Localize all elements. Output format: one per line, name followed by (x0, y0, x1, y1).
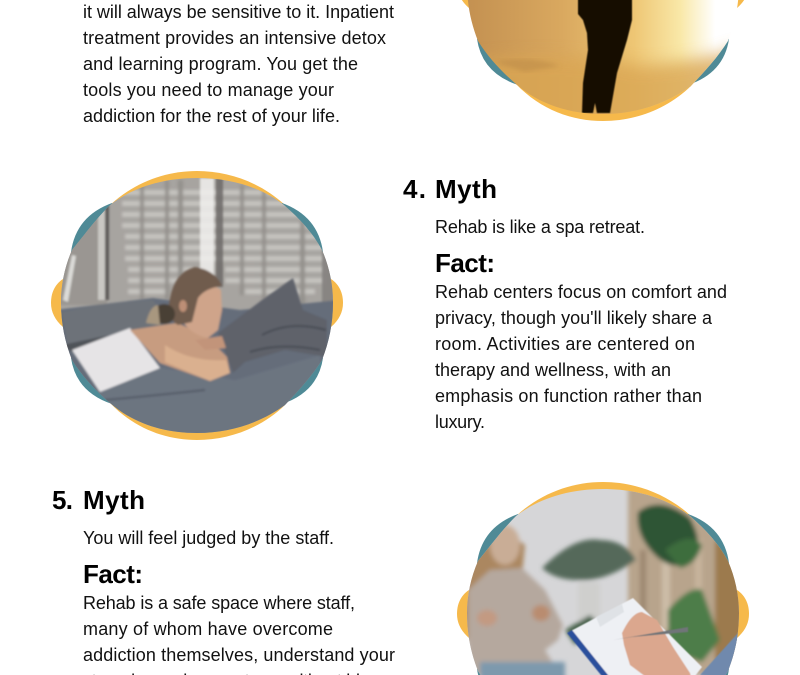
plants (578, 582, 600, 628)
heading: fact 4: Fact: (435, 248, 495, 278)
photo: woman resting on bed (51, 170, 343, 440)
text block: myth 3 fact continuation: it will always be sensitive to it. Inpatient (83, 2, 394, 22)
text block: myth 3 fact continuation (83, 2, 394, 126)
pillow (218, 278, 327, 373)
heading: myth 4: 4. (403, 174, 426, 204)
text block: fact 4: luxury. (435, 412, 485, 432)
text block: fact 5: addiction themselves, understand your (83, 645, 395, 665)
photo: counselor taking notes with client (457, 480, 750, 675)
text block: myth 3 fact continuation: treatment provides an intensive detox (83, 28, 386, 48)
text block: fact 4: Rehab centers focus on comfort and (435, 282, 727, 302)
text block: fact 4: therapy and wellness, with an (435, 360, 671, 380)
heading: myth 5 (52, 485, 145, 515)
text block: fact 5 (83, 593, 395, 675)
text block: myth 3 fact continuation: tools you need to manage your (83, 80, 334, 100)
text: myth 4 statement: Rehab is like a spa retreat. (435, 217, 645, 237)
hair (169, 267, 222, 325)
hand and pen (622, 612, 692, 675)
text block: fact 4: privacy, though you'll likely share a (435, 308, 713, 328)
photo: silhouette at sunset (462, 0, 744, 121)
face (183, 286, 222, 338)
heading: myth 5: Myth (83, 485, 145, 515)
text block: myth 3 fact continuation: and learning program. You get the (83, 54, 358, 74)
text block: fact 4 (435, 282, 727, 432)
text block: fact 4: room. Activities are centered on (435, 334, 695, 354)
heading: myth 5: 5. (52, 485, 73, 515)
client (467, 540, 528, 641)
text block: fact 4: emphasis on function rather than (435, 386, 702, 406)
heading: myth 4 (403, 174, 497, 204)
heading: myth 4: Myth (435, 174, 497, 204)
text: myth 5 statement: You will feel judged by the staff. (83, 528, 334, 548)
back and arm (130, 323, 230, 381)
clipboard (567, 598, 702, 675)
text block: fact 5: Rehab is a safe space where staff, (83, 593, 355, 613)
towel (72, 328, 160, 392)
bed (61, 297, 333, 394)
text block: myth 3 fact continuation: addiction for the rest of your life. (83, 106, 340, 126)
text block: fact 5: many of whom have overcome (83, 619, 333, 639)
heading: fact 5: Fact: (83, 559, 143, 589)
